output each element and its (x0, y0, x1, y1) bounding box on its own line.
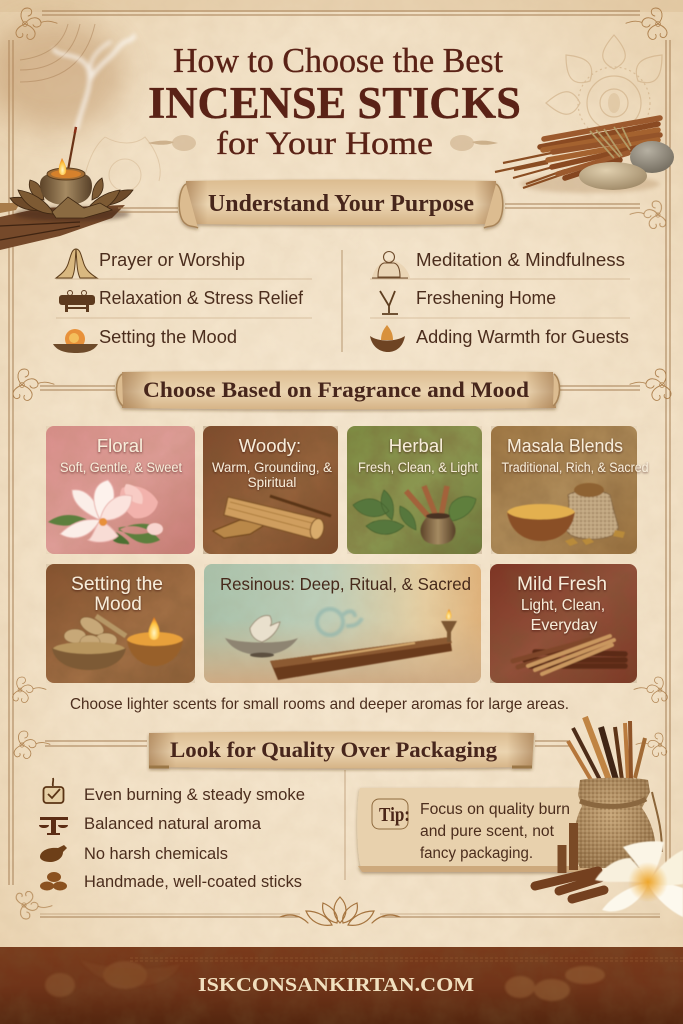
panel: tip scroll (357, 788, 590, 872)
icon: meditating figure (372, 252, 410, 278)
purpose: prayer (56, 249, 245, 278)
faint mandala: top left (0, 20, 125, 130)
footer ornament left (45, 960, 180, 997)
purpose: mood: Setting the Mood (99, 327, 237, 347)
woody subtitle: Warm, Grounding, & (212, 460, 332, 475)
side rule lines for banner 3 (45, 741, 570, 746)
purpose: freshening (380, 288, 556, 314)
title flourish right (450, 135, 498, 151)
illustration: sandalwood log (213, 496, 331, 541)
floral subtitle: Soft, Gentle, & Sweet (60, 460, 182, 475)
icon: burning incense stick (68, 127, 76, 170)
card: Herbal (347, 426, 482, 554)
purpose: relaxation: Relaxation & Stress Relief (99, 288, 304, 308)
stone: tan (579, 162, 647, 190)
icon: burner (59, 290, 95, 312)
item: even burning (44, 778, 305, 804)
item: balanced aroma: Balanced natural aroma (84, 815, 262, 833)
masala heading: Masala Blends (507, 435, 623, 456)
tip text: Focus on quality burn (420, 801, 570, 818)
title line 3: for Your Home (216, 126, 433, 162)
card: Floral (46, 426, 195, 554)
banner: Choose Based on Fragrance and Mood: Choose Based on Fragrance and Mood (143, 377, 530, 402)
illustration: wooden incense holder and lamp (270, 609, 457, 680)
item: no chemicals: No harsh chemicals (84, 845, 228, 863)
icon: incense holder (380, 291, 398, 314)
icon: scale (39, 817, 68, 835)
illustration: ornament swirl (317, 609, 362, 635)
lotus ornament (280, 897, 400, 925)
purpose: prayer: Prayer or Worship (99, 250, 245, 270)
banner: Understand Your Purpose: Understand Your Purpose (208, 191, 474, 217)
icon: wood tray (0, 203, 125, 250)
footer band (0, 947, 683, 1024)
card: Masala Blends (491, 426, 648, 554)
tip text (420, 801, 570, 862)
icon: praying hands (56, 249, 97, 278)
masala subtitle: Traditional, Rich, & Sacred (502, 460, 648, 475)
icon: oil bowl (53, 329, 98, 353)
card: Mild Fresh (490, 564, 637, 683)
purpose: warmth: Adding Warmth for Guests (416, 327, 629, 347)
illustration: jute bag with sticks (535, 717, 662, 899)
thin stick ends (495, 152, 575, 188)
cinnamon sticks (535, 871, 604, 899)
footer ornament right (505, 966, 605, 1001)
illustration: white plumeria (595, 841, 683, 917)
card: Resinous (204, 564, 481, 683)
card: Mild Fresh: Everyday (531, 617, 597, 634)
title flourish left (148, 135, 196, 151)
card: Setting the Mood (46, 564, 195, 683)
illustration: masala bowl and sack (507, 483, 625, 546)
banner: Choose Based on Fragrance and Mood (116, 370, 560, 410)
purpose: meditation: Meditation & Mindfulness (416, 250, 625, 270)
purpose: meditation (372, 250, 625, 278)
icon: diya (370, 325, 405, 352)
upright sticks (562, 823, 574, 873)
item: even burning: Even burning & steady smoke (84, 786, 305, 804)
item: handmade: Handmade, well-coated sticks (84, 873, 302, 891)
resinous heading: Resinous: Deep, Ritual, & Sacred (220, 574, 471, 594)
card: Setting the Mood: Mood (94, 594, 142, 615)
faint mandala behind lamp (85, 137, 160, 191)
mild fresh subtitle: Light, Clean, (521, 597, 605, 614)
card: Woody: Spiritual (248, 475, 296, 490)
tip badge: Tip: (379, 804, 410, 826)
title line 2: INCENSE STICKS (148, 78, 521, 128)
illustration: resin bowl and oil lamp (52, 613, 183, 670)
faint mandala: top right (546, 35, 662, 139)
icon: lamp flame (59, 158, 66, 175)
banner: Look for Quality Over Packaging (149, 732, 534, 768)
purpose: relaxation (59, 288, 304, 312)
jute bag (574, 778, 656, 868)
banner: Understand Your Purpose (179, 180, 503, 228)
incense sticks in bag (568, 717, 645, 780)
banner: Look for Quality Over Packaging: Look for Quality Over Packaging (170, 737, 497, 762)
mood heading: Setting the (71, 574, 163, 595)
purpose: warmth (370, 325, 629, 352)
purpose: freshening: Freshening Home (416, 288, 556, 308)
illustration: magnolia flowers (48, 480, 163, 544)
herbal heading: Herbal (389, 435, 443, 456)
purpose: mood (53, 327, 237, 353)
icon: checkbox (44, 778, 64, 803)
tip text: fancy packaging. (420, 845, 533, 862)
icon: beans (40, 872, 67, 890)
icon: mortar (40, 845, 67, 862)
mild fresh heading: Mild Fresh (517, 574, 607, 595)
panel: quality checklist (39, 778, 305, 891)
icon: incense smoke (54, 36, 134, 128)
tip text: and pure scent, not (420, 823, 555, 840)
woody heading: Woody: (239, 435, 301, 456)
herbal subtitle: Fresh, Clean, & Light (358, 460, 478, 475)
stone: grey (630, 141, 674, 173)
panel: purposes (53, 249, 630, 353)
title (148, 41, 521, 162)
title line 1: How to Choose the Best (173, 41, 503, 80)
icon: lotus lamp (10, 168, 133, 221)
floral heading: Floral (97, 435, 143, 456)
footer website: ISKCONSANKIRTAN.COM (198, 974, 474, 996)
side rule lines for banner 2 (40, 386, 640, 390)
card: Woody (203, 426, 338, 554)
illustration: incense bowl (225, 616, 298, 658)
bundle sticks (540, 118, 660, 178)
bundle string (590, 127, 631, 158)
note text: Choose lighter scents for small rooms and deeper aromas for large areas. (70, 696, 569, 713)
icon: incense bundle and stones (495, 118, 674, 193)
side rule lines for banner 1 (118, 204, 640, 212)
illustration: herbs, sticks and pot (353, 486, 476, 544)
illustration: bundled sticks (513, 636, 625, 674)
tip badge (372, 799, 410, 829)
